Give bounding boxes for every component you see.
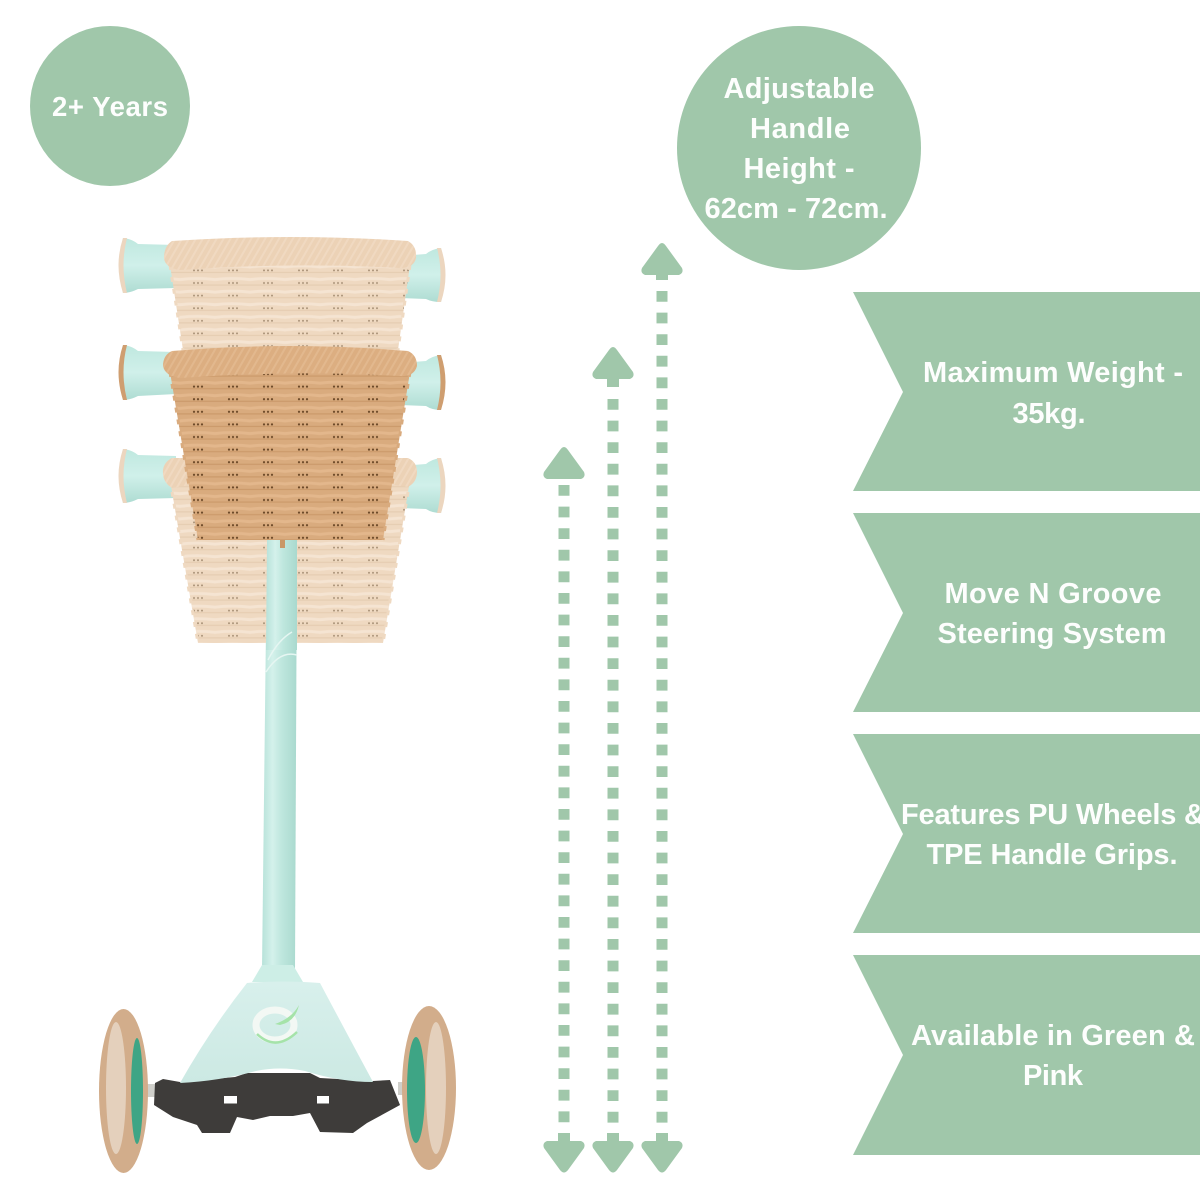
banner: wheels and grips xyxy=(853,734,1200,933)
basket: top light xyxy=(164,237,416,350)
right wheel xyxy=(402,1006,456,1170)
badge: adjustable handle height xyxy=(677,26,921,270)
black fork and axle xyxy=(140,1073,415,1133)
badge: age 2+ years xyxy=(30,26,190,186)
handle grips: lower position xyxy=(118,449,446,513)
dimension arrow: short xyxy=(543,447,585,1172)
badge: adjustable handle height: Adjustable xyxy=(724,73,874,105)
banner: available colours: Available in Green & xyxy=(911,1020,1195,1052)
badge: adjustable handle height: Handle xyxy=(750,113,850,145)
banner: steering system xyxy=(853,513,1200,712)
basket: middle tan xyxy=(163,346,417,548)
banner: wheels and grips: TPE Handle Grips. xyxy=(926,839,1178,871)
badge: adjustable handle height: Height - xyxy=(744,153,854,185)
handle grips: middle position xyxy=(118,345,446,410)
banner: maximum weight xyxy=(853,292,1200,491)
basket: bottom light xyxy=(163,458,417,643)
badge: age 2+ years: 2+ Years xyxy=(52,91,168,122)
banner: maximum weight: Maximum Weight - xyxy=(923,357,1183,389)
banner: steering system: Steering System xyxy=(938,618,1166,650)
banner: available colours xyxy=(853,955,1200,1155)
scooter stem xyxy=(262,540,297,970)
scooter deck with logo xyxy=(180,982,373,1083)
banner: steering system: Move N Groove xyxy=(944,578,1162,610)
left wheel xyxy=(99,1009,148,1173)
banner: maximum weight: 35kg. xyxy=(1012,398,1086,430)
dimension arrow: tall xyxy=(641,243,683,1172)
stem logo swirl xyxy=(266,632,297,672)
stem over lower basket xyxy=(266,540,297,650)
illustration: scooter with baskets xyxy=(99,237,456,1173)
banner: wheels and grips: Features PU Wheels & xyxy=(901,799,1200,831)
dimension arrow: medium xyxy=(592,347,634,1172)
handle grips: top position xyxy=(118,238,446,302)
banner: available colours: Pink xyxy=(1023,1060,1084,1092)
stem collar xyxy=(252,965,303,982)
badge: adjustable handle height: 62cm - 72cm. xyxy=(704,193,888,225)
